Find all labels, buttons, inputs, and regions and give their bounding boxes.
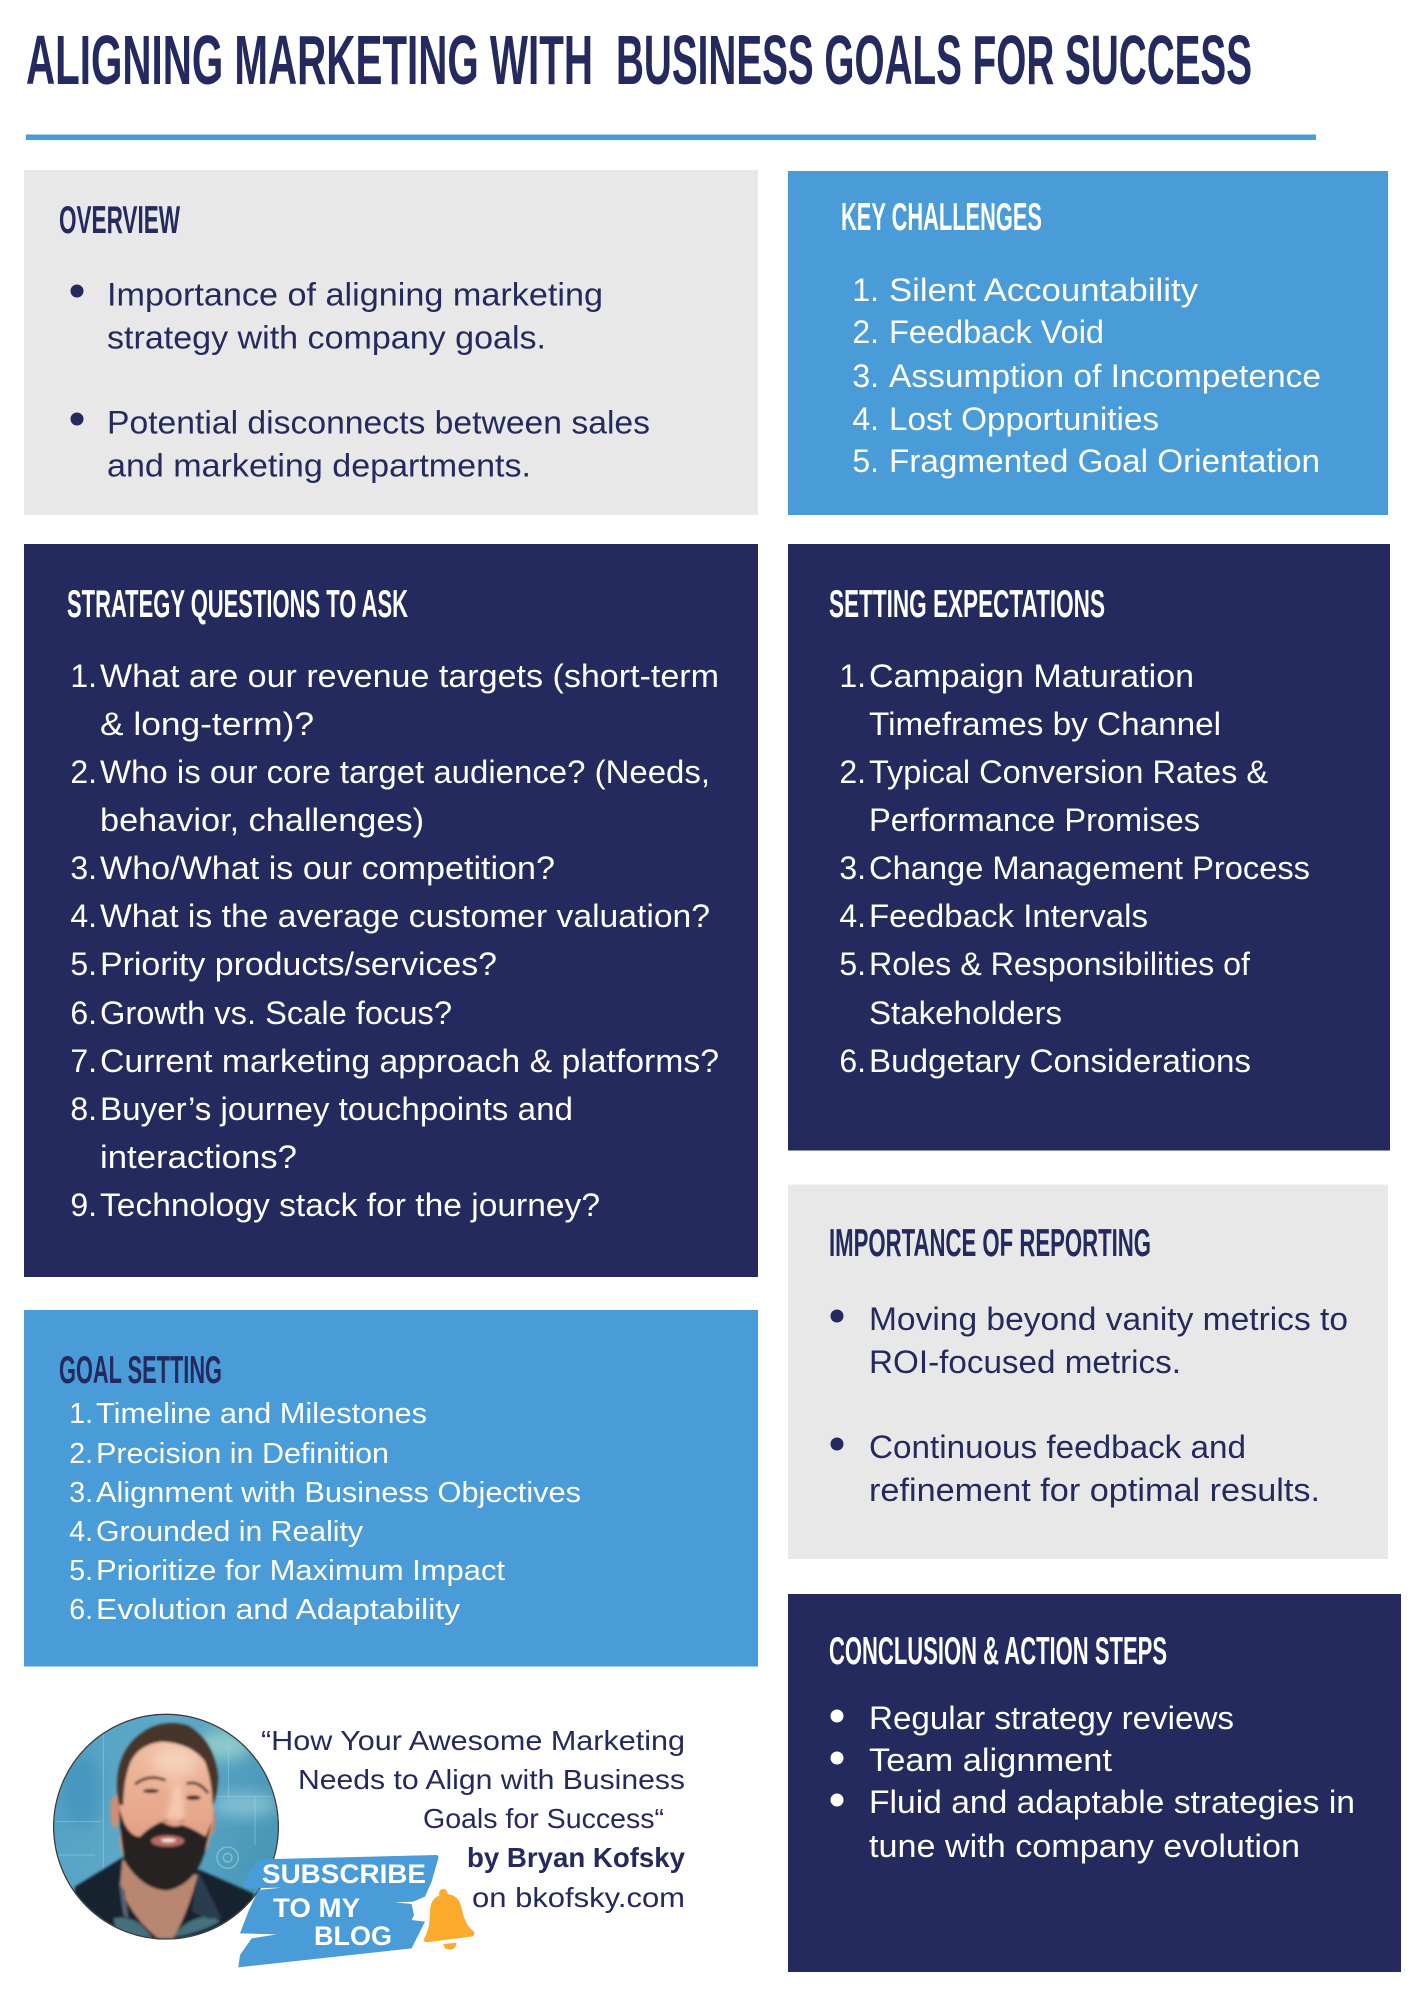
panel: goal setting	[24, 1310, 758, 1666]
heading: conclusion: CONCLUSION & ACTION STEPS	[829, 1630, 1167, 1673]
strategy question list: 4.	[70, 898, 97, 934]
goal setting list: 6.	[69, 1594, 93, 1626]
expectations list: Timeframes by Channel	[869, 706, 1221, 742]
strategy question list: 7.	[70, 1043, 97, 1079]
goal setting list: Prioritize for Maximum Impact	[96, 1555, 505, 1587]
banner shape	[238, 1855, 438, 1967]
goal setting list: 2.	[69, 1438, 93, 1470]
banner text	[262, 1859, 426, 1951]
conclusion bullets: tune with company evolution	[869, 1828, 1300, 1864]
strategy question list	[70, 658, 719, 1223]
key challenges list: 3.	[852, 358, 879, 394]
strategy question list: 1.	[70, 658, 97, 694]
conclusion bullets: Regular strategy reviews	[869, 1700, 1234, 1736]
strategy question list: 8.	[70, 1091, 97, 1127]
expectations list	[839, 658, 1310, 1079]
strategy question list: behavior, challenges)	[100, 802, 424, 838]
expectations list: Change Management Process	[869, 850, 1310, 886]
expectations list: 3.	[839, 850, 866, 886]
heading: overview: OVERVIEW	[59, 199, 180, 242]
author portrait	[52, 1712, 282, 1945]
goal setting list: 5.	[69, 1555, 93, 1587]
key challenges list: Silent Accountability	[889, 272, 1198, 308]
heading: key challenges: KEY CHALLENGES	[841, 196, 1042, 239]
strategy question list: Buyer’s journey touchpoints and	[100, 1091, 573, 1127]
conclusion bullets: Fluid and adaptable strategies in	[869, 1784, 1355, 1820]
strategy question list: 9.	[70, 1187, 97, 1223]
goal setting list: 3.	[69, 1477, 93, 1509]
expectations list: Performance Promises	[869, 802, 1200, 838]
icon: bell	[424, 1889, 474, 1950]
goal setting list: Alignment with Business Objectives	[96, 1477, 581, 1509]
strategy question list: What are our revenue targets (short-term	[100, 658, 719, 694]
strategy question list: 6.	[70, 995, 97, 1031]
heading: importance of reporting: IMPORTANCE OF REPORTING	[829, 1222, 1151, 1265]
banner text: BLOG	[314, 1921, 392, 1951]
expectations list: Roles & Responsibilities of	[869, 946, 1250, 982]
strategy question list: & long-term)?	[100, 706, 314, 742]
overview bullets: Importance of aligning marketing	[107, 276, 603, 312]
expectations list: 1.	[839, 658, 866, 694]
expectations list: Budgetary Considerations	[869, 1043, 1251, 1079]
key challenges list: 1.	[852, 272, 879, 308]
banner text: TO MY	[273, 1893, 360, 1923]
title: ALIGNING MARKETING WITH	[26, 21, 593, 99]
strategy question list: Who is our core target audience? (Needs,	[100, 754, 710, 790]
strategy question list: 2.	[70, 754, 97, 790]
blog credit text: by Bryan Kofsky	[467, 1842, 685, 1873]
strategy question list: Growth vs. Scale focus?	[100, 995, 452, 1031]
overview bullets: strategy with company goals.	[107, 320, 546, 356]
conclusion bullets: Team alignment	[869, 1742, 1112, 1778]
reporting bullets: Moving beyond vanity metrics to	[869, 1301, 1348, 1337]
strategy question list: What is the average customer valuation?	[100, 898, 710, 934]
goal setting list: Precision in Definition	[96, 1438, 389, 1470]
strategy question list: Current marketing approach & platforms?	[100, 1043, 719, 1079]
goal setting list: 4.	[69, 1516, 93, 1548]
overview bullets	[70, 276, 650, 484]
panel: setting expectations	[788, 544, 1390, 1150]
key challenges list: Assumption of Incompetence	[889, 358, 1321, 394]
key challenges list: Lost Opportunities	[889, 401, 1159, 437]
strategy question list: interactions?	[100, 1139, 297, 1175]
expectations list: 5.	[839, 946, 866, 982]
blog credit text	[261, 1725, 685, 1913]
overview bullets: and marketing departments.	[107, 448, 531, 484]
expectations list: Campaign Maturation	[869, 658, 1194, 694]
expectations list: Stakeholders	[869, 995, 1062, 1031]
reporting bullets: refinement for optimal results.	[869, 1472, 1320, 1508]
key challenges list: 2.	[852, 314, 879, 350]
panel: key challenges	[788, 171, 1388, 515]
panel: strategy questions	[24, 544, 758, 1277]
key challenges list: Feedback Void	[889, 314, 1104, 350]
reporting bullets: ROI-focused metrics.	[869, 1344, 1181, 1380]
key challenges list: 5.	[852, 443, 879, 479]
strategy question list: 3.	[70, 850, 97, 886]
heading: setting expectations: SETTING EXPECTATIONS	[829, 583, 1105, 626]
blog credit text: Goals for Success“	[423, 1803, 664, 1834]
overview bullets: Potential disconnects between sales	[107, 404, 650, 440]
key challenges list	[852, 272, 1321, 479]
reporting bullets: Continuous feedback and	[869, 1429, 1246, 1465]
blog credit text: “How Your Awesome Marketing	[261, 1725, 685, 1756]
reporting bullets	[830, 1301, 1348, 1508]
strategy question list: Priority products/services?	[100, 946, 497, 982]
blog credit text: Needs to Align with Business	[298, 1764, 685, 1795]
heading: goal setting: GOAL SETTING	[59, 1349, 222, 1392]
strategy question list: 5.	[70, 946, 97, 982]
blog credit text: on bkofsky.com	[472, 1882, 685, 1913]
expectations list: 6.	[839, 1043, 866, 1079]
key challenges list: Fragmented Goal Orientation	[889, 443, 1320, 479]
subscribe banner	[238, 1855, 438, 1967]
goal setting list: Timeline and Milestones	[96, 1398, 427, 1430]
panel: importance of reporting	[788, 1184, 1388, 1559]
panel: conclusion and action steps	[788, 1594, 1401, 1972]
goal setting list: Grounded in Reality	[96, 1516, 364, 1548]
expectations list: 4.	[839, 898, 866, 934]
expectations list: Typical Conversion Rates &	[869, 754, 1268, 790]
expectations list: Feedback Intervals	[869, 898, 1148, 934]
panel: overview	[24, 170, 758, 515]
goal setting list: 1.	[69, 1398, 93, 1430]
expectations list: 2.	[839, 754, 866, 790]
key challenges list: 4.	[852, 401, 879, 437]
heading: strategy questions: STRATEGY QUESTIONS TO ASK	[67, 583, 408, 626]
conclusion bullets	[830, 1700, 1355, 1864]
banner text: SUBSCRIBE	[262, 1859, 426, 1889]
goal setting list	[69, 1398, 581, 1626]
goal setting list: Evolution and Adaptability	[96, 1594, 461, 1626]
strategy question list: Who/What is our competition?	[100, 850, 555, 886]
strategy question list: Technology stack for the journey?	[100, 1187, 600, 1223]
